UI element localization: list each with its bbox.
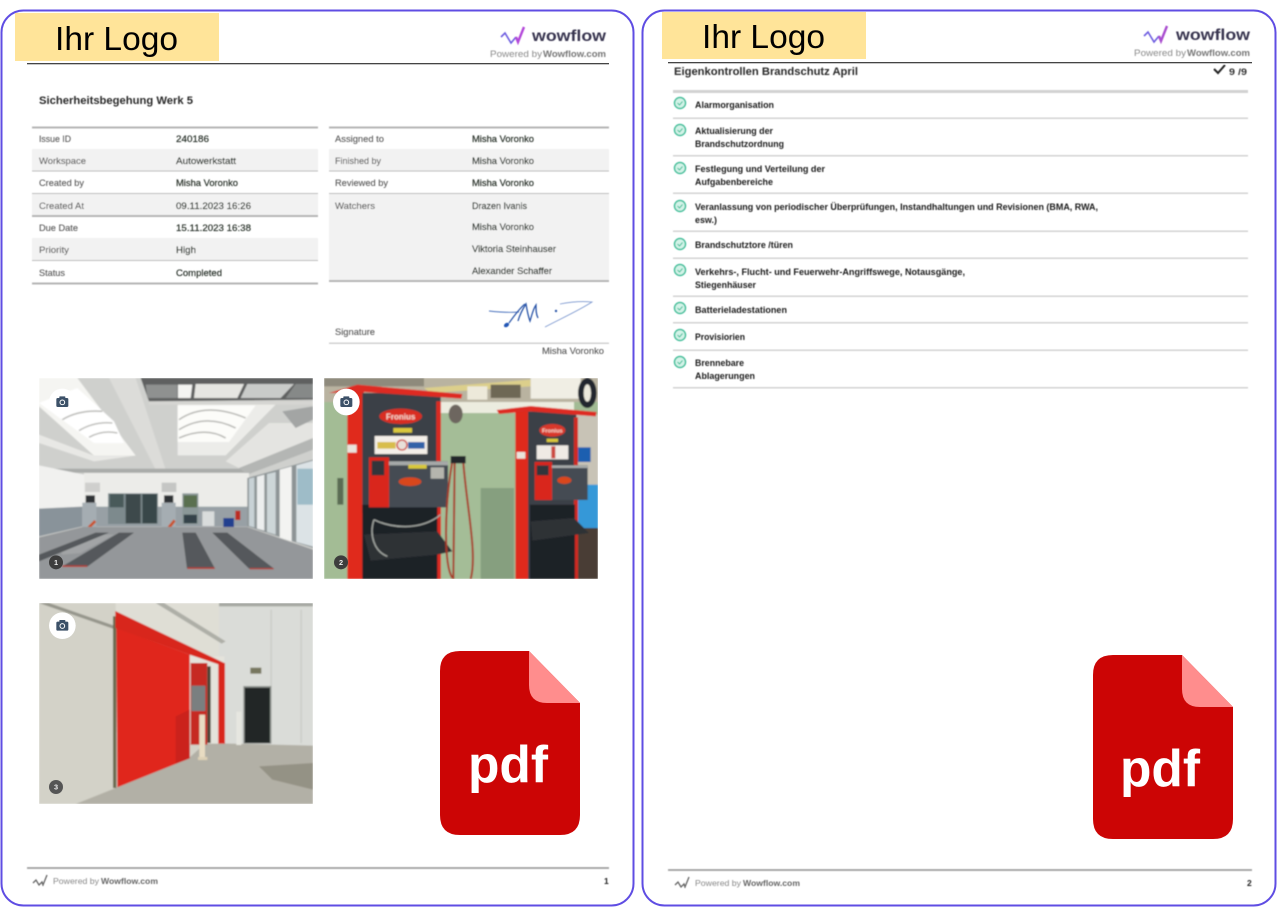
footer page 2: Wowflow.com	[743, 878, 800, 888]
photo 2: fronius chargers	[324, 378, 598, 579]
item: Veranlassung: esw.)	[695, 215, 717, 226]
item: Aktualisierung: Aktualisierung der	[695, 126, 773, 137]
table: issue details: Priority	[39, 245, 69, 256]
photo 2: fronius chargers: Fronius	[542, 429, 563, 435]
wowflow brand	[1134, 26, 1251, 58]
item: Batterieladestationen: Batterieladestationen	[695, 305, 787, 316]
table: issue details: Issue ID	[39, 134, 71, 145]
table: issue details: High	[176, 245, 196, 256]
icon: camera	[333, 389, 360, 415]
table: assignees: Drazen Ivanis	[472, 201, 527, 212]
table: assignees: Finished by	[335, 156, 381, 167]
report title: Sicherheitsbegehung Werk 5	[39, 95, 193, 107]
table: issue details	[32, 126, 318, 284]
table: issue details: Due Date	[39, 223, 78, 234]
table: issue details: 15.11.2023 16:38	[176, 223, 251, 234]
table: issue details: Created At	[39, 201, 84, 212]
item: Alarmorganisation: Alarmorganisation	[695, 100, 774, 111]
item: Festlegung: Festlegung und Verteilung der	[695, 164, 825, 175]
table: issue details: Created by	[39, 178, 84, 189]
icon: pdf file	[440, 651, 580, 835]
icon: pdf file: pdf	[468, 736, 549, 794]
logo placeholder: Ihr Logo	[702, 18, 825, 55]
table: assignees: Viktoria Steinhauser	[472, 244, 556, 255]
item: Aktualisierung: Brandschutzordnung	[695, 139, 784, 150]
item: Brennebare Ablagerungen: Brennebare	[695, 358, 744, 369]
item: Verkehrswege: Verkehrs-, Flucht- und Feuerwehr-Angriffswege, Notausgänge,	[695, 267, 965, 278]
photo 1: workshop hall	[39, 378, 313, 579]
table: assignees: Watchers	[335, 201, 375, 212]
photo number 3	[49, 780, 63, 794]
panel: page 2	[642, 10, 1276, 906]
panel: page 1	[2, 10, 634, 906]
photo number 2	[334, 555, 348, 569]
wowflow brand: Wowflow.com	[543, 49, 606, 59]
table: issue details: Misha Voronko	[176, 178, 238, 189]
table: assignees: Misha Voronko	[472, 134, 534, 145]
wowflow brand: Powered by	[1134, 48, 1187, 58]
item: Festlegung	[674, 162, 825, 188]
footer page 2: Powered by	[695, 878, 742, 888]
photo number 1	[49, 555, 63, 569]
footer page 1	[27, 867, 609, 886]
signature	[329, 302, 609, 357]
icon: pdf file: pdf	[1120, 740, 1201, 798]
wowflow brand: wowflow	[1175, 27, 1251, 44]
item: Brandschutztore	[674, 238, 793, 251]
logo placeholder	[662, 12, 866, 59]
item: Festlegung: Aufgabenbereiche	[695, 177, 773, 188]
photo 2: fronius chargers: Fronius	[386, 412, 416, 421]
wowflow brand: wowflow	[531, 28, 607, 45]
table: assignees: Misha Voronko	[472, 156, 534, 167]
item: Alarmorganisation	[674, 98, 774, 111]
photo number 2: 2	[339, 558, 343, 567]
footer page 1: 1	[604, 876, 609, 886]
table: issue details: Workspace	[39, 156, 86, 167]
item: Brennebare Ablagerungen: Ablagerungen	[695, 371, 755, 382]
logo placeholder	[15, 13, 219, 61]
signature: Misha Voronko	[542, 346, 604, 357]
signature: Signature	[335, 327, 375, 338]
item: Batterieladestationen	[674, 302, 787, 316]
photo number 3: 3	[54, 783, 58, 792]
table: assignees: Alexander Schaffer	[472, 266, 552, 277]
wowflow brand: Wowflow.com	[1187, 48, 1250, 58]
table: issue details: 09.11.2023 16:26	[176, 201, 251, 212]
checklist title: Eigenkontrollen Brandschutz April	[674, 66, 858, 78]
checklist	[673, 90, 1248, 388]
item: Veranlassung: Veranlassung von periodischer Überprüfungen, Instandhaltungen und Revisionen (BMA, RWA,	[695, 202, 1098, 213]
checklist score	[1214, 65, 1247, 78]
table: assignees: Assigned to	[335, 134, 384, 145]
item: Provisiorien: Provisiorien	[695, 332, 745, 343]
footer page 1: Wowflow.com	[101, 876, 158, 886]
footer page 2: 2	[1247, 878, 1252, 888]
table: assignees: Reviewed by	[335, 178, 388, 189]
icon: pdf file	[1093, 655, 1233, 839]
table: assignees: Misha Voronko	[472, 178, 534, 189]
logo placeholder: Ihr Logo	[55, 20, 178, 57]
table: issue details: Completed	[176, 268, 222, 279]
wowflow brand	[490, 27, 607, 59]
item: Verkehrswege	[674, 264, 965, 291]
table: assignees: Misha Voronko	[472, 222, 534, 233]
icon: camera	[49, 389, 76, 415]
item: Brandschutztore: Brandschutztore /türen	[695, 240, 793, 251]
wowflow brand: Powered by	[490, 49, 543, 59]
item: Aktualisierung	[674, 124, 784, 150]
table: issue details: Status	[39, 268, 65, 279]
item: Provisiorien	[674, 330, 745, 343]
photo 3: red fire door	[39, 603, 313, 804]
item: Veranlassung	[674, 200, 1098, 226]
table: issue details: 240186	[176, 134, 209, 145]
table: assignees	[329, 126, 609, 282]
photo number 1: 1	[54, 558, 58, 567]
footer page 1: Powered by	[53, 876, 100, 886]
footer page 2	[668, 869, 1252, 888]
item: Verkehrswege: Stiegenhäuser	[695, 280, 756, 291]
icon: camera	[49, 612, 76, 639]
checklist score: 9 /9	[1229, 67, 1247, 78]
table: issue details: Autowerkstatt	[176, 156, 236, 167]
item: Brennebare Ablagerungen	[674, 356, 755, 382]
